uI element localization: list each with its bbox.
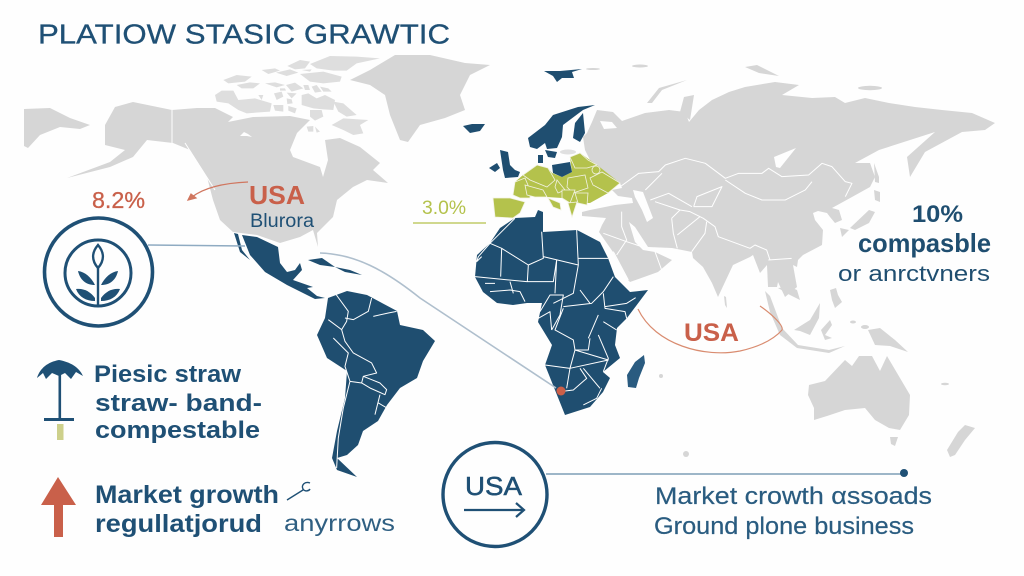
map: navy Africa xyxy=(475,210,648,415)
callout: 3.0%: 3.0% xyxy=(422,198,466,219)
text: Market crowth xyxy=(654,483,932,540)
callout: 10% compasble: 10% xyxy=(912,201,963,228)
text: anyrrows: anyrrows xyxy=(284,510,395,536)
map: navy South America xyxy=(317,291,435,477)
label: USA Blurora: USA xyxy=(249,180,305,210)
icon: umbrella xyxy=(37,360,83,440)
text: Market growth: Market growth xyxy=(95,481,279,509)
map: grey North America and Greenland xyxy=(24,55,490,247)
arrow: USA to 8.2% xyxy=(188,182,248,200)
text: Market crowth: Ground plone business xyxy=(654,513,914,540)
map: green central Europe xyxy=(493,153,620,218)
text: Piesic straw: Piesic straw xyxy=(94,361,241,388)
callout: USA with arc xyxy=(638,306,782,353)
map: navy Madagascar xyxy=(627,355,645,388)
label: USA Blurora xyxy=(249,180,314,232)
text: Piesic straw: straw- band- xyxy=(95,390,262,417)
text: Piesic straw xyxy=(94,361,262,444)
marker: southern Africa dot xyxy=(556,386,566,396)
title: PLATIOW STASIC GRAWTIC xyxy=(38,18,450,50)
map: seas cut out of Eurasia xyxy=(600,121,796,222)
callout: 10% compasble xyxy=(838,201,991,286)
icon: red up arrow xyxy=(41,477,76,537)
text: Market growth: regullatjorud xyxy=(95,510,262,538)
world map xyxy=(24,55,995,477)
callout: 3.0% xyxy=(413,198,486,223)
map: grey Australia and Oceania xyxy=(659,287,975,457)
callout: USA with arc: USA xyxy=(684,319,739,347)
icon: plant in circle xyxy=(44,218,152,326)
map: navy Mexico and Caribbean xyxy=(234,233,362,299)
map: navy northern Europe xyxy=(463,69,595,178)
connector with end dot xyxy=(546,469,908,477)
connector: circle to Mexico xyxy=(148,245,245,246)
icon: small hook xyxy=(287,482,310,500)
text: Market crowth: Market crowth αssoads xyxy=(655,483,932,510)
map: Asia borders xyxy=(620,158,852,207)
callout: 10% compasble: or anrctvners xyxy=(838,261,990,286)
connector: Mexico to southern Africa xyxy=(320,253,556,388)
callout: 8.2%: 8.2% xyxy=(92,187,145,213)
map: grey Eurasia xyxy=(560,64,995,353)
callout: 10% compasble: compasble xyxy=(858,228,991,258)
text: Market growth xyxy=(95,481,279,538)
icon: USA circle with arrow xyxy=(443,442,547,546)
text: Piesic straw: compestable xyxy=(95,417,260,444)
map: arctic islands xyxy=(215,56,380,135)
label: USA Blurora: Blurora xyxy=(250,211,314,232)
icon: USA circle with arrow: USA xyxy=(465,471,523,501)
